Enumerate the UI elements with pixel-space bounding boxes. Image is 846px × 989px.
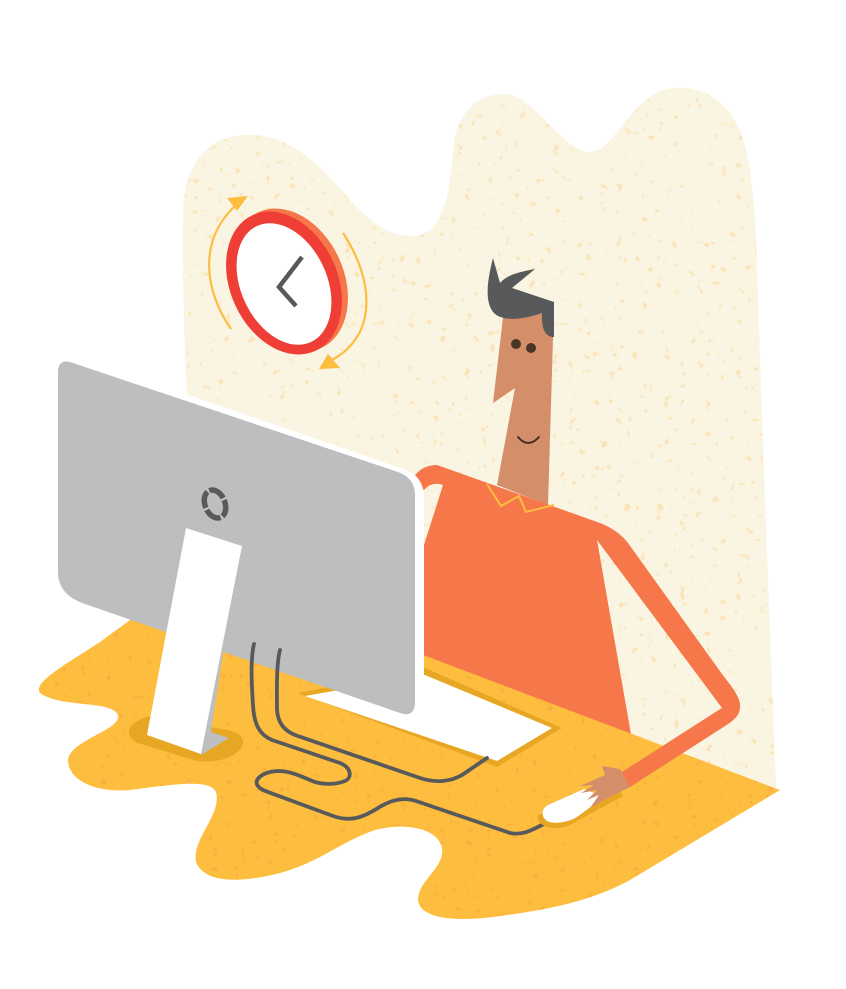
hair bbox=[488, 258, 554, 337]
clock red frame bbox=[204, 193, 364, 373]
desk bbox=[38, 620, 780, 919]
shirt collar bbox=[487, 484, 554, 512]
rotation arrow: right bbox=[319, 233, 366, 369]
monitor stand shadow bbox=[129, 716, 243, 762]
illustration: person at desktop computer bbox=[38, 88, 780, 919]
clock rim side bbox=[210, 190, 370, 370]
face bbox=[493, 300, 554, 505]
wall background blob bbox=[170, 80, 790, 800]
rotation arrow: left bbox=[209, 196, 248, 329]
monitor stand side bbox=[190, 640, 229, 755]
wall clock bbox=[204, 190, 370, 373]
person head bbox=[488, 258, 554, 505]
mouse shadow bbox=[538, 786, 623, 828]
monitor back bbox=[58, 361, 415, 714]
cable to keyboard bbox=[277, 650, 487, 781]
logo ring bbox=[200, 487, 230, 521]
monitor stand front bbox=[147, 528, 242, 754]
eyes bbox=[511, 339, 536, 353]
keyboard bbox=[298, 668, 562, 767]
monitor white bezel bbox=[72, 355, 424, 715]
monitor cables bbox=[252, 644, 548, 834]
person torso and arm bbox=[412, 465, 740, 787]
hand bbox=[580, 766, 630, 808]
cable to mouse bbox=[252, 644, 548, 834]
clock hands bbox=[279, 257, 302, 306]
forearm over desk bbox=[622, 674, 740, 787]
smile bbox=[518, 437, 539, 443]
computer monitor bbox=[58, 355, 424, 754]
computer mouse bbox=[543, 789, 604, 823]
clock face bbox=[218, 208, 350, 360]
